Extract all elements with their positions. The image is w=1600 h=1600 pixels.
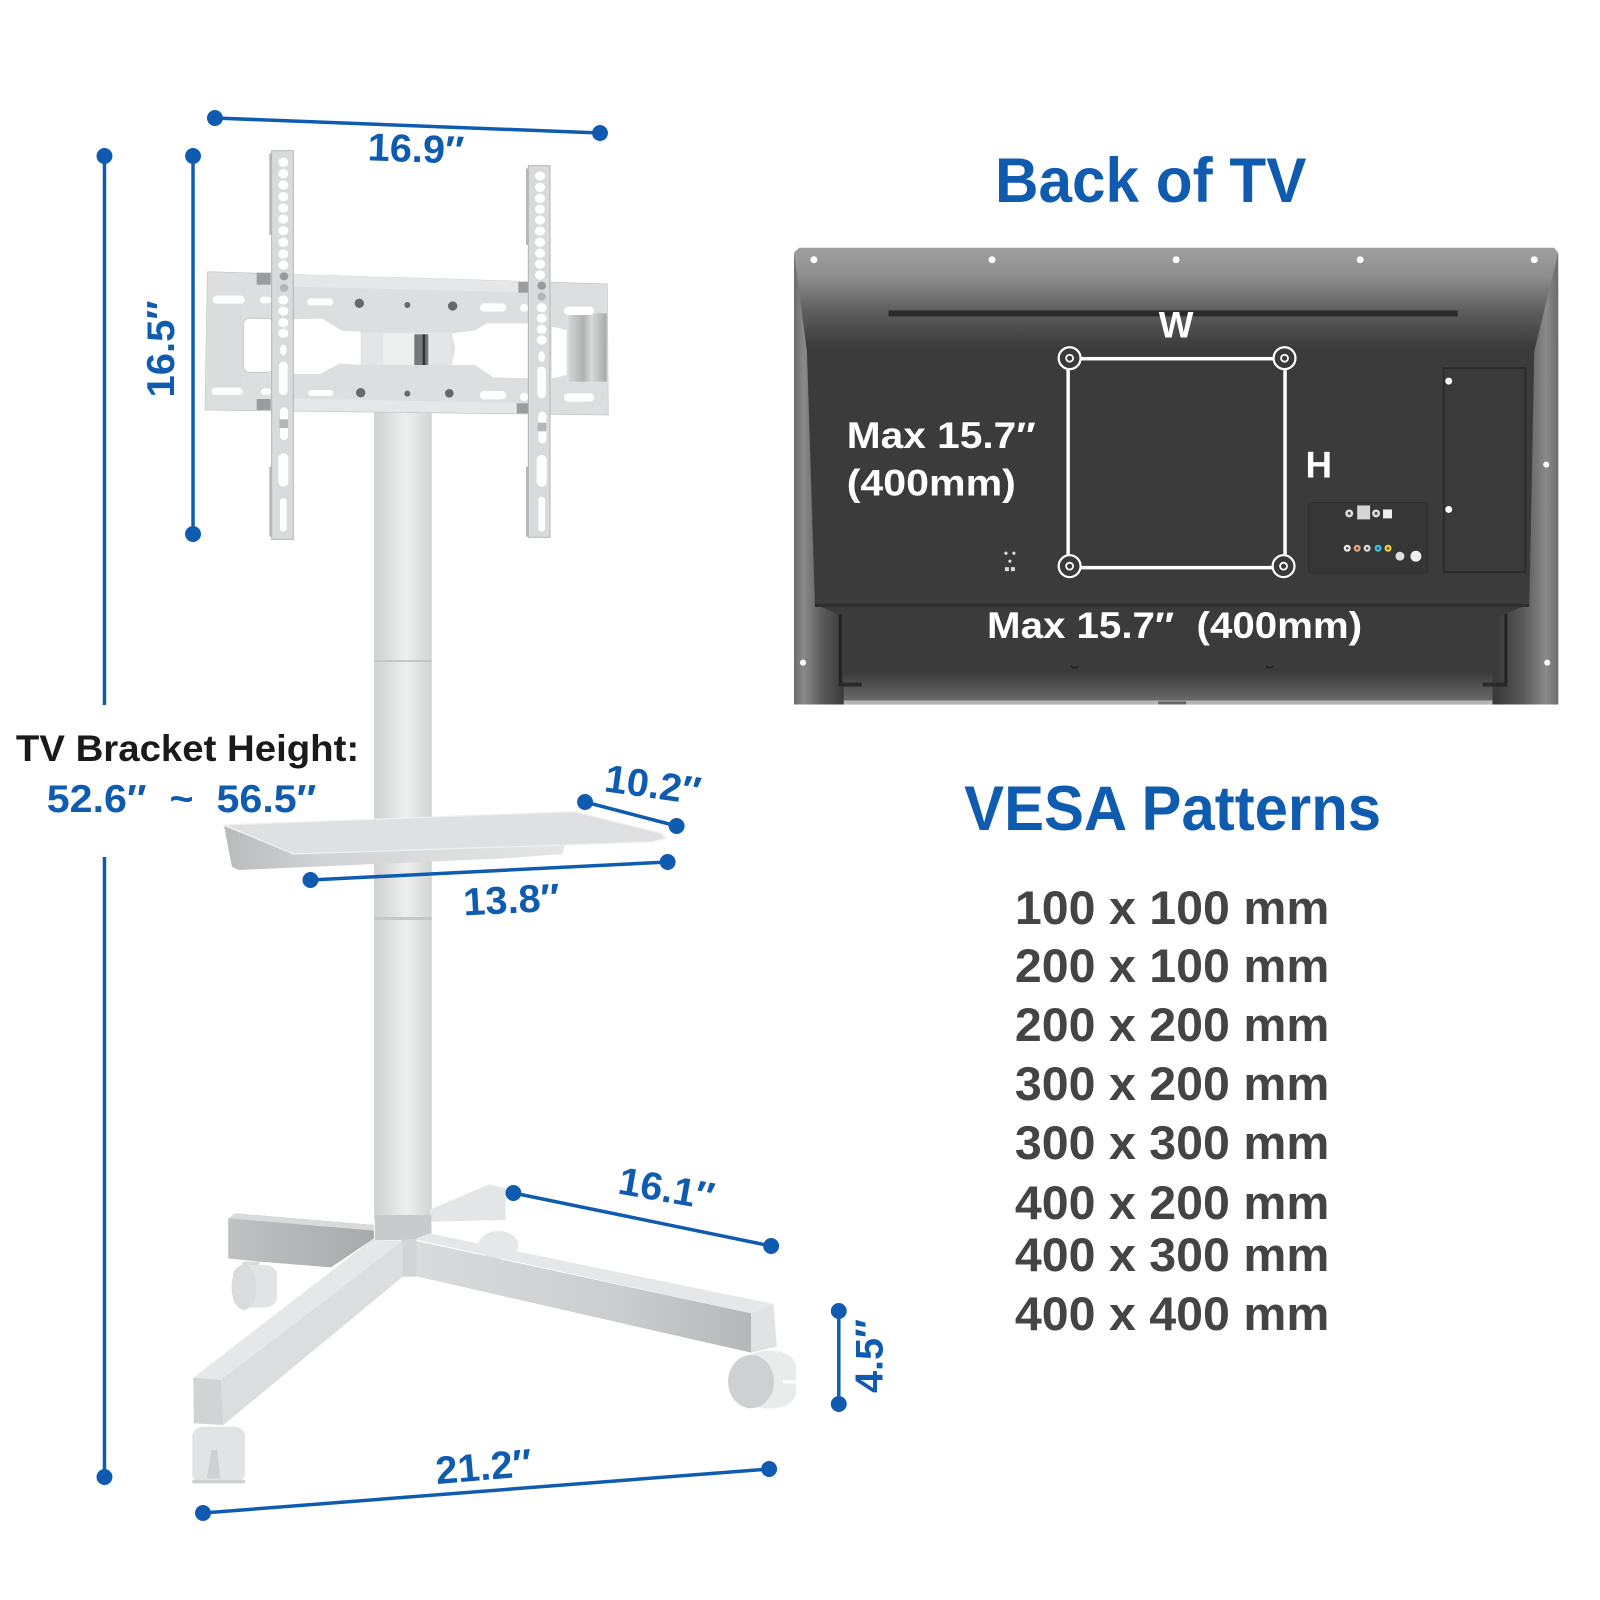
label: TV bracket height: [16, 728, 359, 821]
dimension: base width 21.2: [195, 1442, 777, 1521]
label: max height: Max 15.7″: [847, 415, 1036, 456]
dimension: bracket height 16.5: 16.5″: [140, 301, 183, 398]
small connector: [1004, 552, 1015, 571]
back-left arm: [228, 1213, 374, 1267]
dimension: base depth 16.1: [505, 1160, 779, 1254]
screw holes: [800, 256, 1550, 666]
dimension: shelf depth 10.2: 10.2″: [602, 757, 704, 814]
list: VESA patterns: 300 x 300 mm: [1015, 1117, 1329, 1169]
list: VESA patterns: 200 x 200 mm: [1015, 999, 1329, 1051]
dimension: bracket width 16.9: 16.9″: [367, 126, 465, 173]
TV body: [794, 248, 1558, 704]
TV stand illustration: [192, 151, 796, 1483]
label: max height: (400mm): [847, 463, 1016, 504]
list: VESA patterns: 400 x 400 mm: [1015, 1288, 1329, 1340]
label: W: W: [1159, 304, 1194, 345]
front-right wheel: [728, 1351, 796, 1408]
label: H: H: [1305, 445, 1332, 486]
access panel: [1444, 368, 1525, 572]
dimension: overall height line: [97, 148, 112, 1485]
mounting bracket: [205, 151, 608, 539]
dimension: shelf width 13.8: 13.8″: [462, 876, 561, 925]
shelf: [224, 812, 666, 870]
dimension: bracket height 16.5: [140, 148, 201, 542]
back-left wheel: [232, 1262, 277, 1310]
list: VESA patterns: 100 x 100 mm: [1015, 882, 1329, 934]
heading: VESA Patterns: VESA Patterns: [964, 774, 1381, 844]
heading: Back of TV: Back of TV: [995, 146, 1307, 216]
dimension: caster height 4.5: 4.5″: [849, 1319, 892, 1393]
ports panel: [1308, 502, 1428, 573]
list: VESA patterns: [1015, 882, 1329, 1340]
list: VESA patterns: 200 x 100 mm: [1015, 940, 1329, 992]
front-right arm: [415, 1233, 777, 1353]
VESA mounting square: [1059, 347, 1295, 577]
front-left arm: [193, 1240, 403, 1425]
dimension: bracket width 16.9: [207, 110, 608, 173]
list: VESA patterns: 300 x 200 mm: [1015, 1058, 1329, 1110]
dimension: caster height 4.5: [831, 1303, 892, 1412]
stand pole: [374, 405, 432, 1220]
list: VESA patterns: 400 x 200 mm: [1015, 1177, 1329, 1229]
left rail: [269, 151, 293, 539]
label: max width: Max 15.7″ (400mm): [987, 605, 1362, 646]
list: VESA patterns: 400 x 300 mm: [1015, 1229, 1329, 1281]
front-left wheel: [192, 1427, 245, 1483]
panel: back of TV: [794, 248, 1558, 704]
dimension: shelf depth 10.2: [577, 757, 704, 834]
right rail: [526, 166, 550, 537]
wheeled base: [192, 1184, 796, 1483]
dimension: shelf width 13.8: [302, 854, 676, 925]
label: max height: [847, 415, 1036, 504]
hub: [401, 1239, 416, 1277]
dimension: base depth 16.1: 16.1″: [615, 1160, 718, 1219]
back-right arm: [429, 1184, 506, 1222]
dimension: base width 21.2: 21.2″: [434, 1442, 534, 1493]
hub collar: [375, 1215, 431, 1240]
label: TV bracket height: TV Bracket Height:: [16, 728, 359, 769]
label: TV bracket height: 52.6″ ~ 56.5″: [47, 778, 316, 821]
back-right wheel: [478, 1231, 519, 1259]
